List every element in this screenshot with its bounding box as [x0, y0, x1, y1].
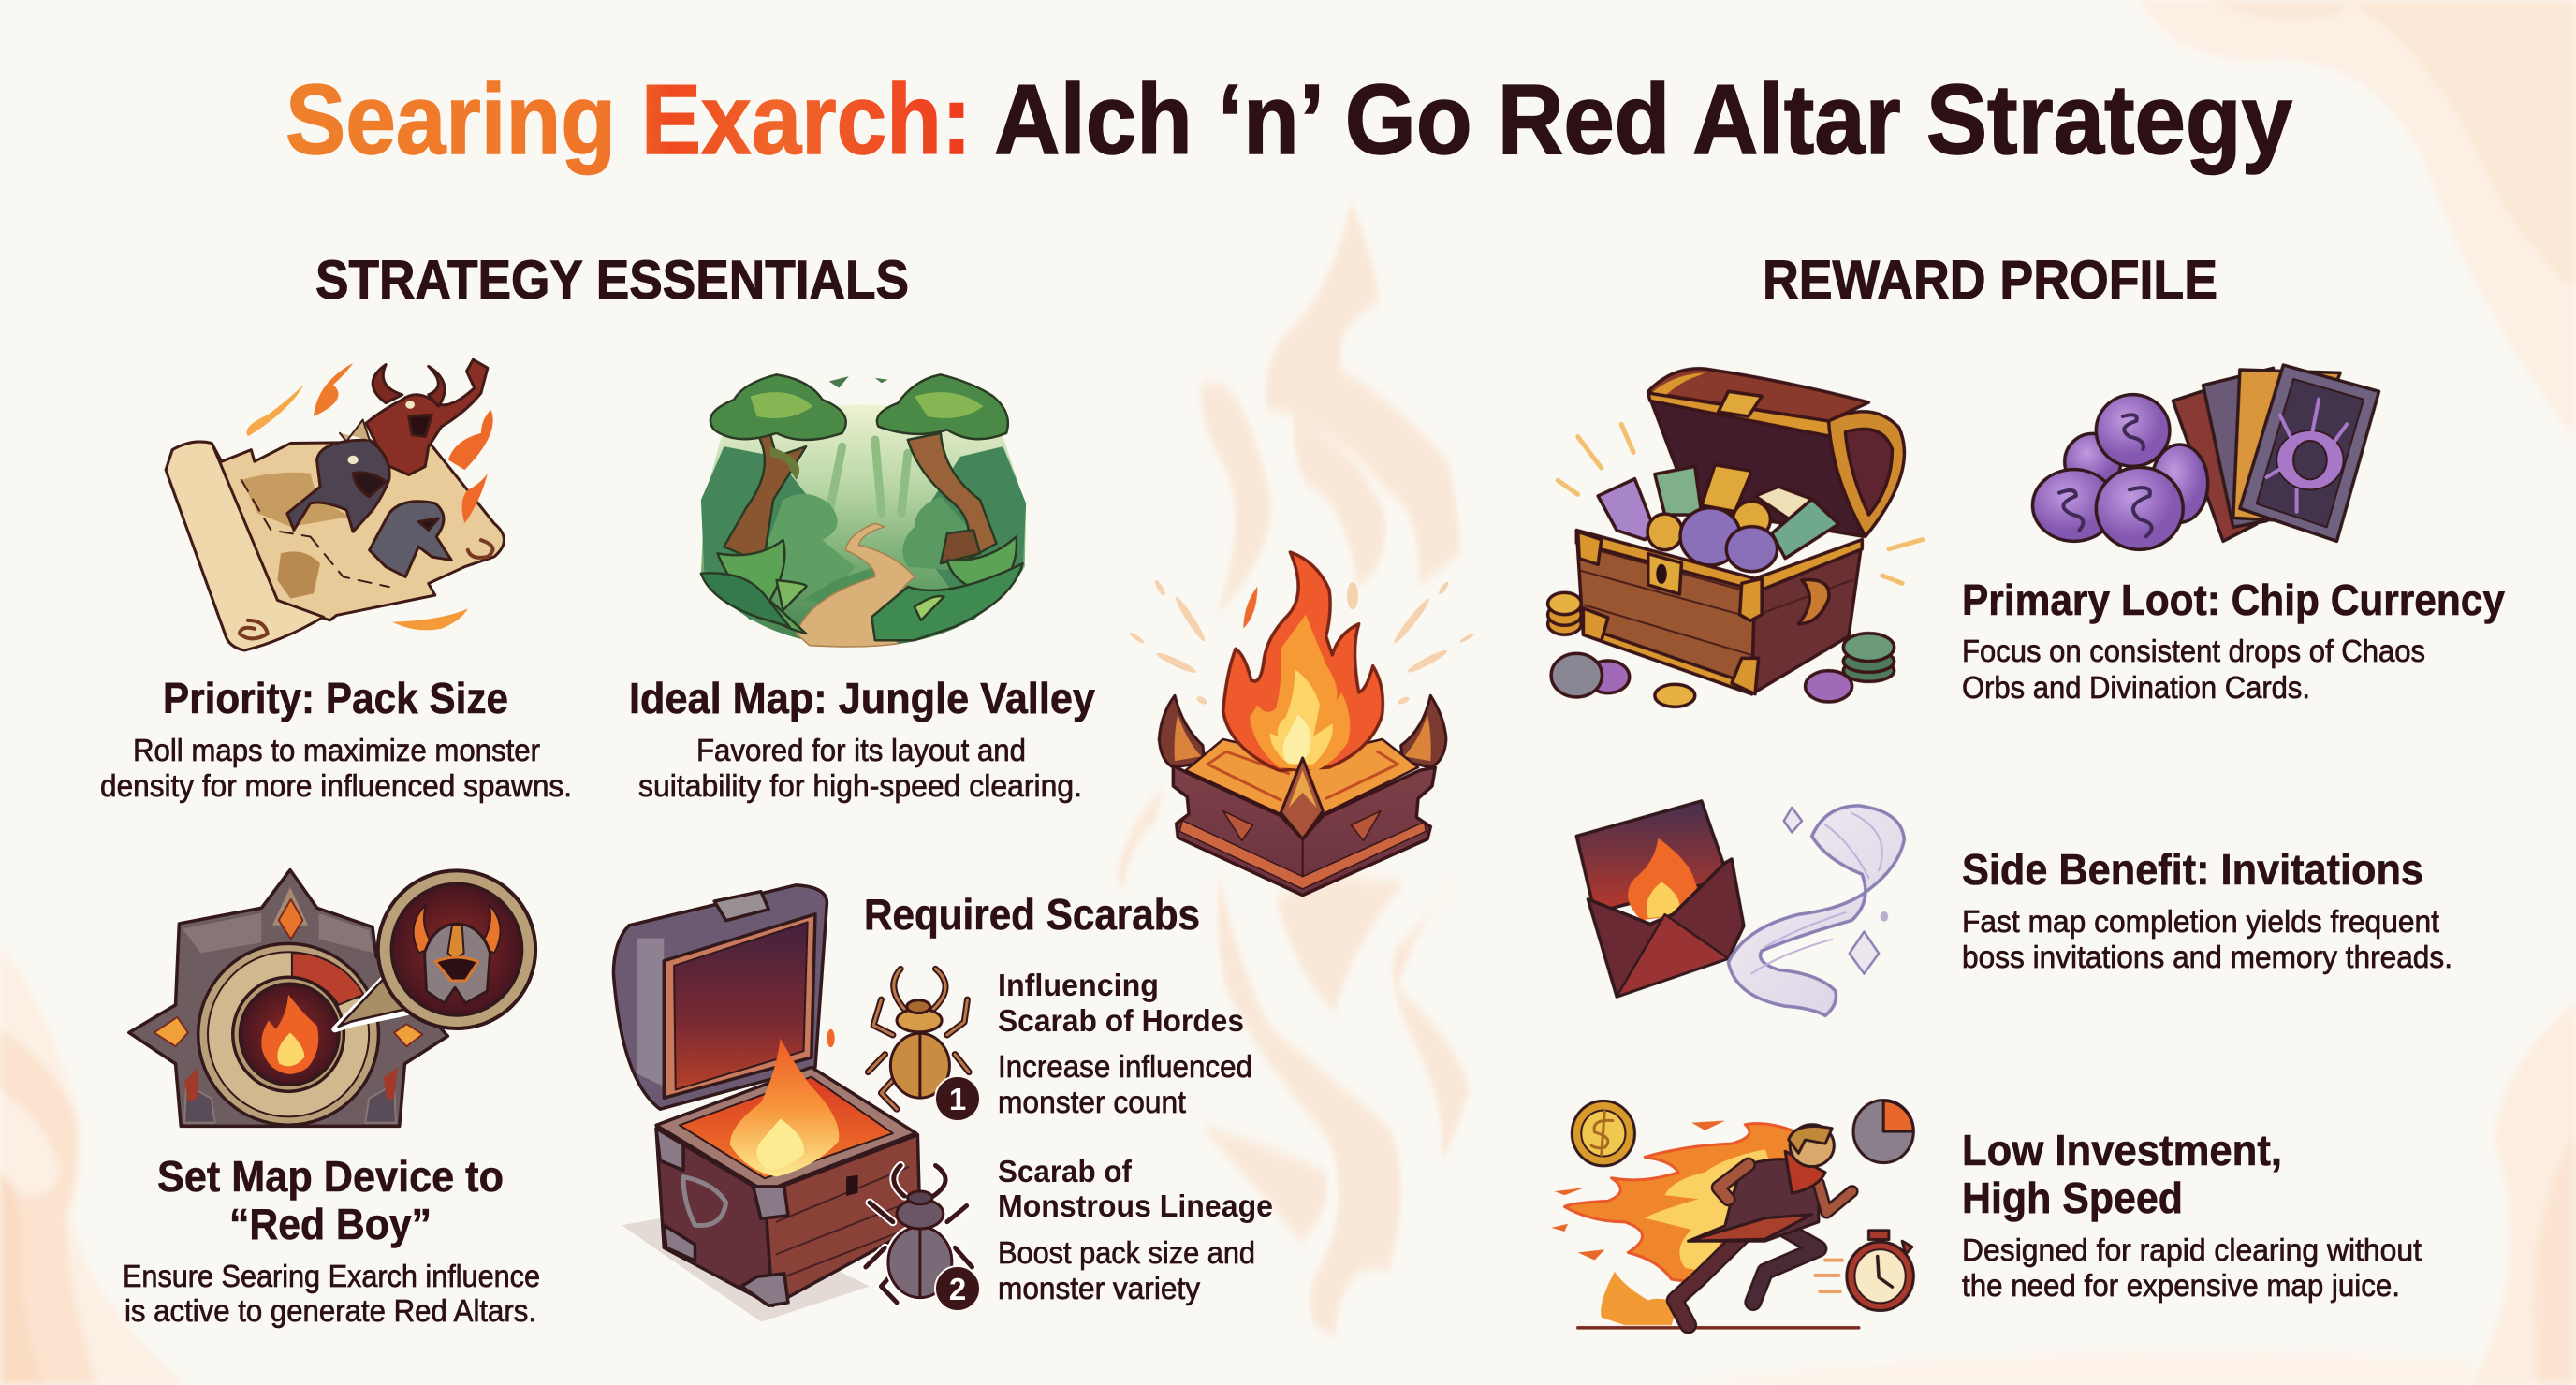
text: map device description: Ensure Searing Exarch influence — [123, 1259, 540, 1293]
text: map device description — [123, 1259, 540, 1328]
heading: low investment high speed — [1962, 1126, 2282, 1222]
panel: priority pack size — [100, 359, 572, 803]
heading: reward profile: REWARD PROFILE — [1763, 250, 2217, 311]
icon: overflowing treasure chest — [1548, 369, 1923, 707]
text: side benefit description: Fast map completion yields frequent — [1962, 904, 2439, 939]
heading: required scarabs: Required Scarabs — [864, 890, 1200, 939]
icon: flaming runner with coin, pie chart and stopwatch — [1551, 1101, 1913, 1328]
text: scarab 2 description: monster variety — [998, 1271, 1200, 1305]
icon: map device with helmet bubble — [129, 870, 535, 1126]
panel: map device — [123, 870, 540, 1328]
badge: number 2: 2 — [949, 1272, 966, 1306]
text: side benefit description — [1962, 904, 2452, 974]
heading: set map device — [157, 1152, 504, 1248]
icon: central flaming altar — [1129, 552, 1475, 896]
icon: jungle valley — [701, 374, 1026, 647]
panel: primary loot — [1548, 365, 2505, 707]
text: scarab 2 description: Boost pack size and — [998, 1235, 1255, 1270]
badge: number 2 — [935, 1266, 980, 1311]
panel: low investment high speed — [1551, 1101, 2422, 1328]
text: map device description: is active to generate Red Altars. — [124, 1293, 536, 1328]
text: ideal map description — [638, 733, 1082, 803]
label: scarab 2 name: Scarab of — [998, 1154, 1133, 1188]
text: ideal map description: suitability for high-speed clearing. — [638, 768, 1082, 803]
text: priority description: Roll maps to maximize monster — [133, 733, 540, 767]
text: priority description: density for more influenced spawns. — [100, 768, 572, 803]
heading: strategy essentials: STRATEGY ESSENTIALS — [315, 250, 909, 311]
label: scarab 1 name: Influencing — [998, 968, 1159, 1002]
label: scarab 2 name: Monstrous Lineage — [998, 1188, 1273, 1223]
title — [285, 65, 2292, 175]
text: primary loot description — [1962, 634, 2425, 705]
text: ideal map description: Favored for its layout and — [696, 733, 1026, 767]
scarab 1: influencing scarab of hordes — [868, 968, 1252, 1121]
text: priority description — [100, 733, 572, 803]
heading: set map device: “Red Boy” — [229, 1200, 432, 1248]
heading: low investment high speed: Low Investment, — [1962, 1126, 2282, 1174]
icon: map scroll with monsters — [166, 359, 504, 650]
heading: side benefit: Side Benefit: Invitations — [1962, 845, 2423, 894]
text: scarab 1 description: monster count — [998, 1085, 1186, 1119]
icon: chaos orbs and divination cards — [2032, 365, 2378, 549]
text: low investment description — [1962, 1232, 2422, 1303]
heading: set map device: Set Map Device to — [157, 1152, 504, 1201]
heading: priority pack size: Priority: Pack Size — [163, 674, 508, 722]
label: scarab 1 name: Scarab of Hordes — [998, 1003, 1244, 1038]
panel: side benefit — [1576, 801, 2452, 1015]
icon: grey scarab — [866, 1165, 972, 1303]
text: primary loot description: Orbs and Divination Cards. — [1962, 670, 2310, 705]
heading: low investment high speed: High Speed — [1962, 1174, 2183, 1222]
scarab 2: scarab of monstrous lineage — [866, 1154, 1273, 1311]
text: scarab 1 description: Increase influenced — [998, 1049, 1252, 1084]
label: scarab 1 name — [998, 968, 1244, 1038]
text: low investment description: Designed for rapid clearing without — [1962, 1232, 2422, 1267]
heading: ideal map: Ideal Map: Jungle Valley — [629, 674, 1095, 722]
text: scarab 2 description — [998, 1235, 1255, 1305]
badge: number 1: 1 — [949, 1082, 966, 1116]
text: low investment description: the need for expensive map juice. — [1962, 1268, 2400, 1303]
heading: primary loot: Primary Loot: Chip Currency — [1962, 576, 2505, 624]
label: scarab 2 name — [998, 1154, 1273, 1223]
icon: invitation envelope and memory thread — [1576, 801, 1904, 1015]
badge: number 1 — [935, 1076, 980, 1121]
title: Alch ‘n’ Go Red Altar Strategy — [994, 65, 2292, 175]
text: side benefit description: boss invitations and memory threads. — [1962, 940, 2452, 974]
panel: required scarabs — [613, 885, 1273, 1321]
title: Searing Exarch: — [285, 65, 972, 175]
icon: bronze scarab — [868, 969, 969, 1109]
icon: fiery open chest — [613, 885, 920, 1321]
panel: ideal map jungle valley — [629, 374, 1095, 803]
text: primary loot description: Focus on consistent drops of Chaos — [1962, 634, 2425, 668]
text: scarab 1 description — [998, 1049, 1252, 1119]
